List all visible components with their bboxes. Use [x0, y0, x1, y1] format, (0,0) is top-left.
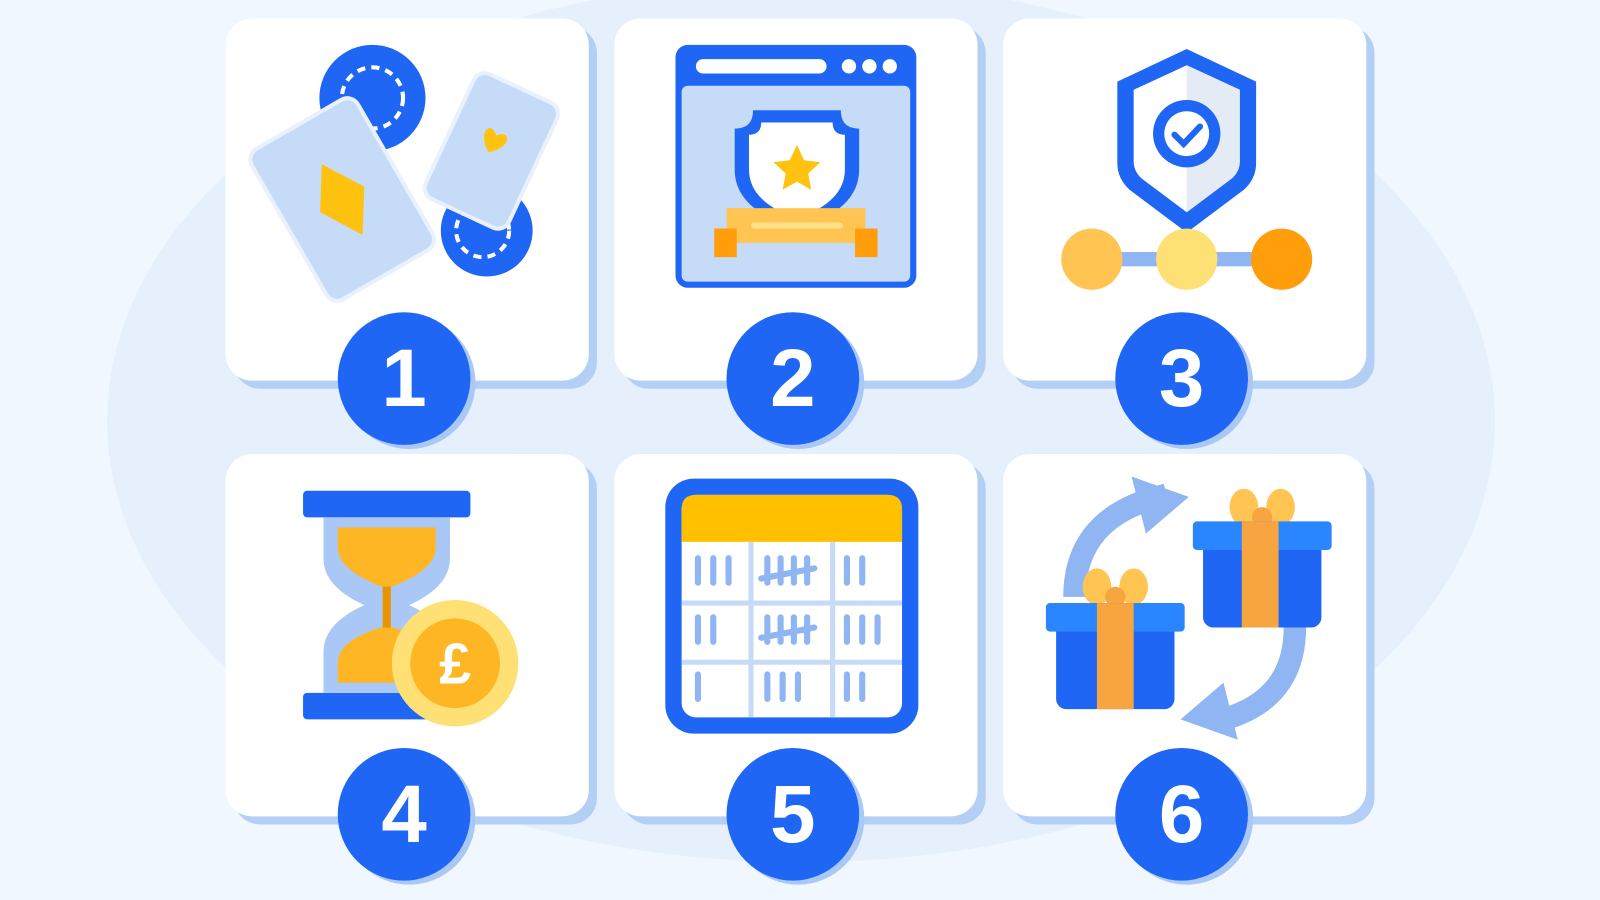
card 6: exchanging gifts [1003, 454, 1366, 816]
card 1: casino chips and cards [226, 18, 589, 381]
icon: hourglass and coin [303, 490, 518, 726]
number 3: 3 [1159, 333, 1204, 423]
number 6: 6 [1159, 768, 1204, 859]
icon: shield with check and dots [1061, 49, 1312, 290]
card 2: certified website [614, 18, 978, 381]
card 4: hourglass with pound coin [226, 454, 589, 816]
number 4 [338, 748, 470, 881]
number 3 [1115, 312, 1248, 445]
number 5 [727, 748, 859, 881]
number 1 [338, 312, 470, 445]
icon: gifts with arrows [1046, 476, 1332, 740]
icon: chips and cards [248, 44, 560, 303]
number 1: 1 [381, 333, 427, 423]
card 5: tally chart [614, 454, 978, 816]
number 4: 4 [381, 768, 427, 859]
number 5: 5 [770, 768, 816, 859]
icon: hourglass and coin: £ [439, 633, 471, 697]
card 3: security shield [1003, 18, 1366, 381]
number 2: 2 [770, 333, 816, 423]
number 6 [1115, 748, 1248, 881]
icon: tally table [665, 478, 918, 734]
number 2 [727, 312, 859, 445]
icon: browser with shield [676, 44, 916, 288]
